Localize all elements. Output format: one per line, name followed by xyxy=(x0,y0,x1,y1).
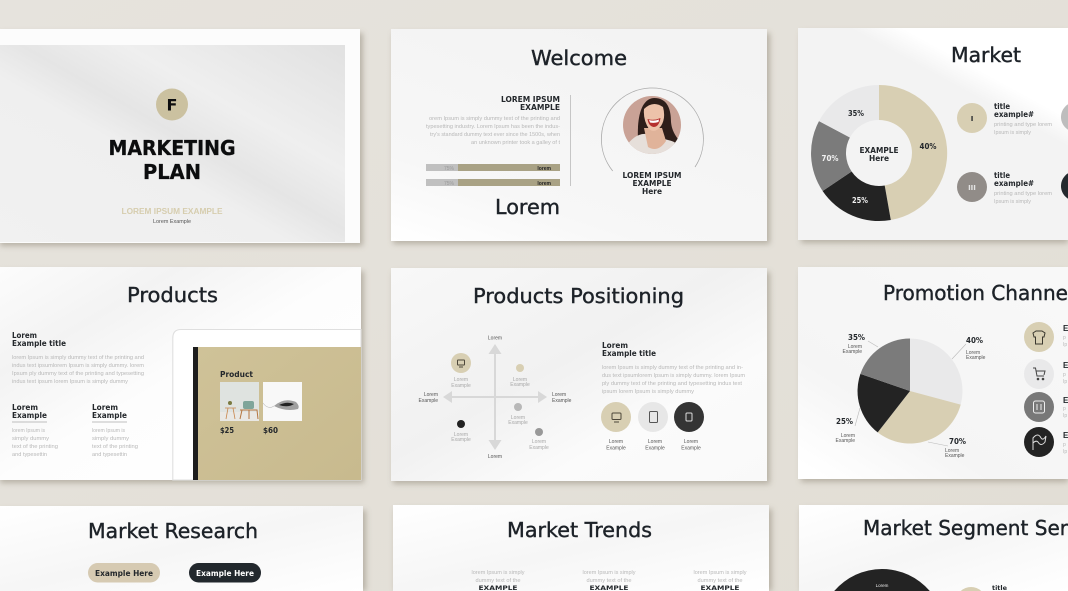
positioning points: Example xyxy=(529,445,549,451)
profile caption: Here xyxy=(642,187,663,196)
positioning points xyxy=(451,353,549,451)
positioning points: Example xyxy=(510,382,530,388)
column 2: and typesettin xyxy=(92,452,127,458)
positioning text: ipsum lorem Ipsum is simply dummy xyxy=(602,389,695,395)
panel: products positioning xyxy=(391,268,767,481)
item IV badge xyxy=(1061,173,1068,199)
positioning text: Example title xyxy=(602,349,657,358)
product label: Product xyxy=(220,370,253,379)
progress bars: lorem xyxy=(537,166,552,172)
pie labels: Lorem xyxy=(848,344,862,350)
pie labels: 25% xyxy=(836,417,853,426)
channel labels: p xyxy=(1063,406,1066,412)
logo badge xyxy=(156,88,188,120)
intro text: Ipsum ply dummy text of the printing and typesetting xyxy=(12,371,144,377)
welcome heading: Welcome xyxy=(531,46,627,70)
promotion heading: Promotion Channe xyxy=(883,281,1068,305)
cover subtitle: Lorem Example xyxy=(153,219,191,225)
intro text: indus text ipsumlorem Ipsum is simply dummy. lorem xyxy=(12,363,144,369)
channel labels: p xyxy=(1063,372,1066,378)
prices: $25 xyxy=(220,426,234,435)
device icons: Example xyxy=(606,446,626,452)
axis labels: Example xyxy=(552,398,572,404)
column 1: and typesettin xyxy=(12,452,47,458)
positioning axes xyxy=(443,344,547,450)
intro text: Example title xyxy=(12,339,67,348)
lorem ipsum heading: LOREM IPSUM xyxy=(501,95,560,104)
item I xyxy=(957,102,1052,136)
item III: III xyxy=(968,184,976,192)
pie labels: Example xyxy=(966,355,986,361)
item I: title xyxy=(994,102,1010,111)
column 1: lorem Ipsum is xyxy=(12,428,45,434)
body text xyxy=(426,116,561,146)
item III xyxy=(957,171,1052,205)
lorem ipsum heading xyxy=(501,95,560,112)
pie labels: 70% xyxy=(949,437,966,446)
portrait photo xyxy=(623,96,681,154)
column 2: Lorem xyxy=(92,403,118,412)
channel labels: Ip xyxy=(1063,449,1067,455)
axis labels: Lorem xyxy=(488,336,502,342)
channel labels xyxy=(1063,324,1068,455)
device icons: Example xyxy=(681,446,701,452)
item III: example# xyxy=(994,179,1034,188)
donut chart: EXAMPLE xyxy=(860,146,898,155)
positioning text xyxy=(602,341,745,395)
axis labels xyxy=(419,336,572,460)
pie labels: Example xyxy=(945,453,965,459)
channel icons xyxy=(1024,322,1054,457)
column 2: Example xyxy=(92,411,128,420)
logo badge: F xyxy=(167,96,177,114)
axis labels: Example xyxy=(419,398,438,404)
channel labels: Ip xyxy=(1063,342,1067,348)
trend column 1: dummy text of the xyxy=(476,578,521,584)
positioning points: Example xyxy=(451,437,471,443)
donut chart xyxy=(811,85,947,221)
positioning text: lorem Ipsum is simply dummy text of the printing and in- xyxy=(602,365,743,371)
product photo: mouse xyxy=(263,382,302,421)
positioning points: Example xyxy=(508,420,528,426)
trend column 3: dummy text of the xyxy=(698,578,743,584)
research heading: Market Research xyxy=(88,519,258,543)
pie labels: Lorem xyxy=(966,350,980,356)
body text: typesetting industry. Lorem Ipsum has been the indus- xyxy=(426,124,560,130)
trends heading: Market Trends xyxy=(507,518,652,542)
column 1: Lorem xyxy=(12,403,38,412)
profile caption: LOREM IPSUM xyxy=(622,171,682,180)
donut chart: Here xyxy=(869,154,889,163)
axis labels: Lorem xyxy=(552,392,566,398)
positioning points: Lorem xyxy=(511,415,525,421)
column 2: lorem Ipsum is xyxy=(92,428,125,434)
positioning text: dus text ipsumlorem Ipsum is simply dummy. lorem Ipsum xyxy=(602,373,745,379)
column 1: text of the printing xyxy=(12,444,58,450)
column 2: text of the printing xyxy=(92,444,138,450)
cover subtitle: LOREM IPSUM EXAMPLE xyxy=(122,207,223,216)
device icons: Lorem xyxy=(609,439,623,445)
positioning points: Lorem xyxy=(532,439,546,445)
channel labels: Ip xyxy=(1063,413,1067,419)
button: beige xyxy=(88,563,160,582)
cover subtitle xyxy=(122,207,223,225)
panel: market trends xyxy=(393,505,769,591)
progress bars xyxy=(426,164,560,187)
item I: example# xyxy=(994,110,1034,119)
lorem ipsum heading: EXAMPLE xyxy=(520,103,560,112)
panel: promotion channels xyxy=(798,267,1068,479)
item III: title xyxy=(994,171,1010,180)
positioning heading: Products Positioning xyxy=(473,284,684,308)
cover title: MARKETING xyxy=(108,136,236,160)
intro text: lorem Ipsum is simply dummy text of the printing and xyxy=(12,355,144,361)
device icons: Lorem xyxy=(648,439,662,445)
segment circle xyxy=(834,569,930,591)
pie labels: Example xyxy=(836,438,855,444)
donut chart: 40% xyxy=(920,142,937,151)
column 2 xyxy=(92,403,138,458)
channel labels: p xyxy=(1063,442,1066,448)
item III: printing and type lorem xyxy=(994,191,1052,197)
body text: orem Ipsum is simply dummy text of the printing and xyxy=(429,116,560,122)
segment badge xyxy=(961,587,981,591)
positioning text: Lorem xyxy=(602,341,628,350)
segment circle: Lorem xyxy=(876,583,889,588)
column 1: Example xyxy=(12,411,48,420)
pie labels: Lorem xyxy=(841,433,855,439)
button: dark xyxy=(189,563,261,582)
axis labels: Lorem xyxy=(424,392,438,398)
prices xyxy=(220,426,278,435)
device icons: Lorem xyxy=(684,439,698,445)
device icons: Example xyxy=(645,446,665,452)
intro text: indus text ipsum lorem Ipsum is simply dummy xyxy=(12,379,129,385)
item I: Ipsum is simply xyxy=(994,130,1032,136)
positioning text: ply dummy text of the printing and typesetting indus text xyxy=(602,381,743,387)
trend column 2: dummy text of the xyxy=(586,578,632,584)
column 1 xyxy=(12,403,58,458)
positioning points: Lorem xyxy=(513,377,527,383)
column 2: simply dummy xyxy=(92,436,130,442)
item II badge xyxy=(1061,104,1068,130)
donut chart: 70% xyxy=(822,154,839,163)
trend column 1 xyxy=(472,570,525,591)
channel labels: Ip xyxy=(1063,379,1067,385)
market heading: Market xyxy=(951,43,1021,67)
donut chart: 35% xyxy=(848,109,864,118)
segment heading: Market Segment Ser xyxy=(863,516,1068,540)
prices: $60 xyxy=(263,426,278,435)
column 1: simply dummy xyxy=(12,436,50,442)
profile caption: EXAMPLE xyxy=(632,179,672,188)
progress bars: 75% xyxy=(444,166,455,172)
item I: I xyxy=(971,115,973,123)
product photo: chair xyxy=(220,382,259,421)
products heading: Products xyxy=(127,283,218,307)
progress bars: 75% xyxy=(444,181,455,187)
button: beige: Example Here xyxy=(95,569,153,578)
pie labels: 40% xyxy=(966,336,983,345)
item I: printing and type lorem xyxy=(994,122,1052,128)
positioning points: Lorem xyxy=(454,377,468,383)
pie labels: Example xyxy=(843,349,862,355)
trend column 3: lorem Ipsum is simply xyxy=(694,570,747,576)
progress bars: lorem xyxy=(537,181,552,187)
trend column 1: lorem Ipsum is simply xyxy=(472,570,525,576)
panel: welcome xyxy=(391,29,767,241)
panel: market xyxy=(798,28,1068,240)
cover title: PLAN xyxy=(143,160,201,184)
profile arc xyxy=(601,88,703,171)
donut chart: 25% xyxy=(852,196,868,205)
trend column 2 xyxy=(582,570,636,591)
pie labels: Lorem xyxy=(945,448,959,454)
positioning points: Lorem xyxy=(454,432,468,438)
body text: an unknown printer took a galley of t xyxy=(471,140,561,146)
device icons xyxy=(601,402,704,452)
panel: market segment xyxy=(799,505,1068,591)
lorem label: Lorem xyxy=(495,195,560,219)
pie labels xyxy=(836,333,986,459)
intro text: Lorem xyxy=(12,331,37,340)
button: dark: Example Here xyxy=(196,569,254,578)
tablet mockup xyxy=(173,330,361,480)
profile caption xyxy=(622,171,682,196)
panel: market research xyxy=(0,506,363,591)
item III: Ipsum is simply xyxy=(994,199,1032,205)
body text: try's standard dummy text ever since the 1500s, when xyxy=(430,132,560,138)
cover title xyxy=(108,136,236,184)
positioning points: Example xyxy=(451,383,471,389)
axis labels: Lorem xyxy=(488,454,502,460)
channel labels: p xyxy=(1063,335,1066,341)
intro text xyxy=(12,331,144,385)
trend column 2: lorem Ipsum is simply xyxy=(582,570,636,576)
panel: products xyxy=(0,267,361,480)
panel: marketing plan cover xyxy=(0,29,360,243)
trend column 3 xyxy=(694,570,747,591)
pie labels: 35% xyxy=(848,333,865,342)
pie chart xyxy=(858,338,962,444)
